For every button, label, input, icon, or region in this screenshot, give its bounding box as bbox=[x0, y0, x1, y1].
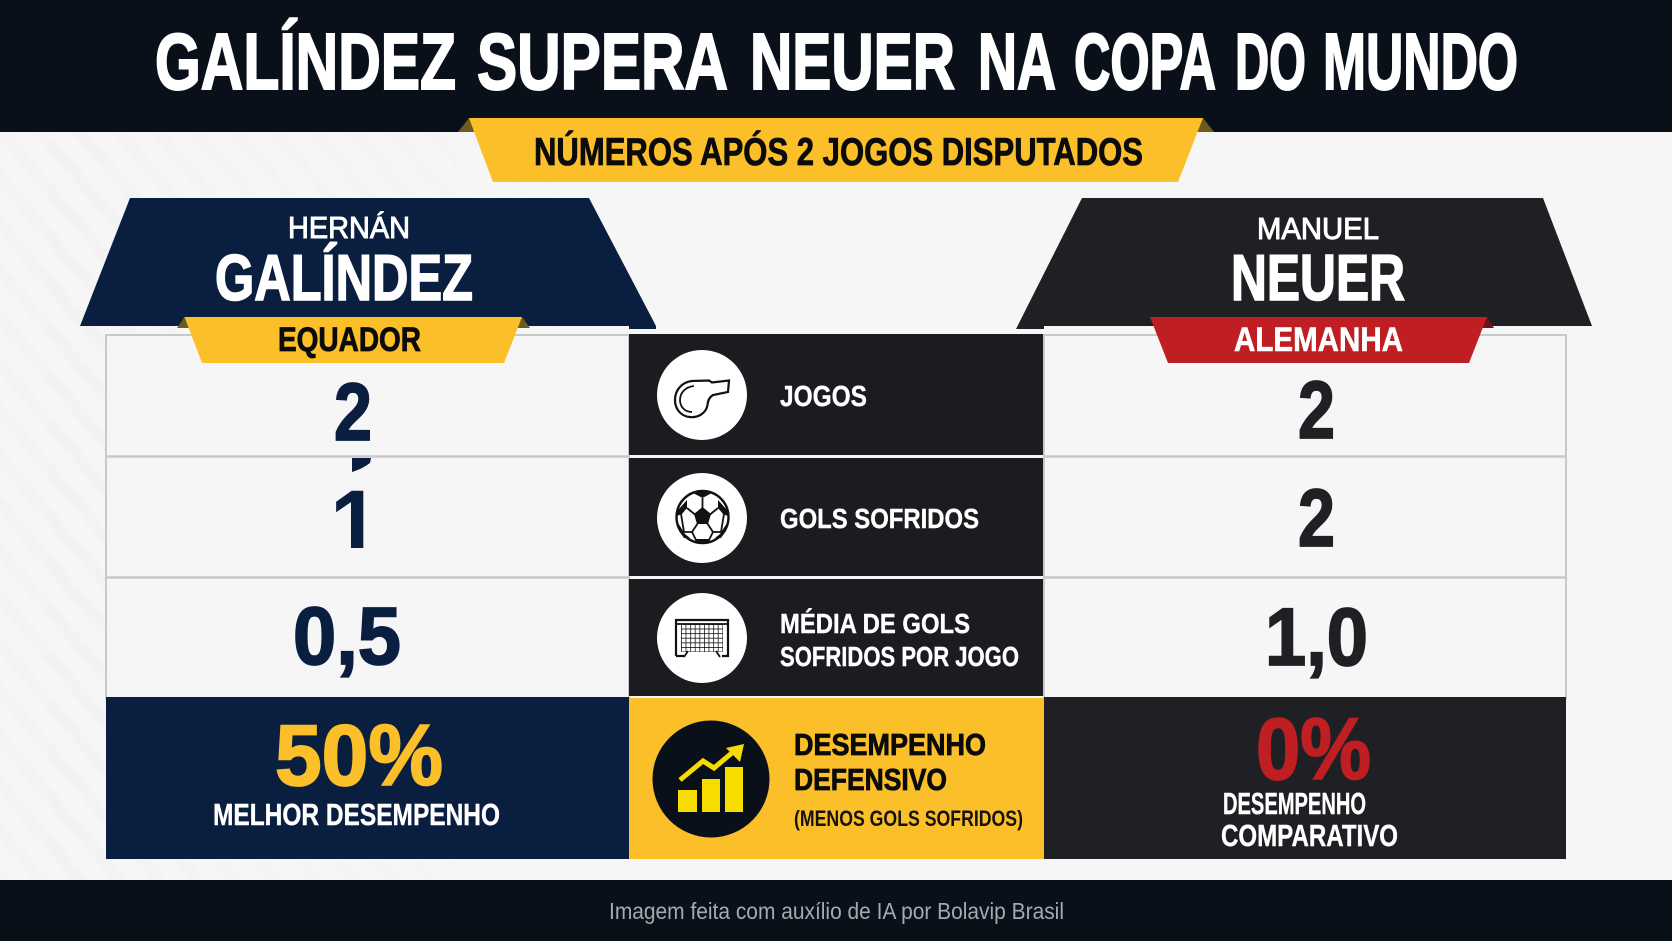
title: GALÍNDEZ bbox=[155, 17, 456, 106]
country banner: Alemanha: ALEMANHA bbox=[1234, 321, 1403, 359]
label: GOLS SOFRIDOS bbox=[780, 503, 979, 534]
label: MÉDIA DE GOLS bbox=[780, 608, 970, 639]
row: gols sofridos bbox=[629, 458, 1043, 576]
panel: Galíndez resultado bbox=[106, 697, 629, 859]
row: jogos bbox=[629, 334, 1043, 455]
first name: MANUEL bbox=[1257, 211, 1379, 246]
icon: soccer ball bbox=[657, 473, 747, 563]
country banner: Equador: EQUADOR bbox=[278, 321, 421, 359]
panel: Galíndez name plate bbox=[80, 198, 656, 363]
title: SUPERA bbox=[477, 17, 728, 106]
label: DEFENSIVO bbox=[794, 762, 947, 797]
header bar with title bbox=[0, 0, 1672, 132]
caption: DESEMPENHO bbox=[1223, 786, 1366, 821]
label bbox=[780, 608, 1019, 672]
surname: GALÍNDEZ bbox=[215, 241, 473, 314]
subtitle banner: NÚMEROS APÓS 2 JOGOS DISPUTADOS bbox=[534, 130, 1143, 174]
title: NEUER bbox=[750, 17, 955, 106]
value: Galíndez média: 0,5 bbox=[293, 591, 401, 682]
label: (MENOS GOLS SOFRIDOS) bbox=[794, 806, 1023, 831]
percentage: 0% bbox=[1256, 701, 1371, 798]
icon: goal bbox=[657, 593, 747, 683]
value: Galíndez jogos: 2 bbox=[334, 367, 372, 458]
subtitle banner bbox=[458, 118, 1214, 182]
panel: Neuer name plate bbox=[1016, 198, 1592, 363]
panel: Neuer resultado bbox=[1044, 697, 1566, 859]
caption: COMPARATIVO bbox=[1221, 818, 1398, 853]
percentage: 50% bbox=[275, 708, 443, 804]
first name: HERNÁN bbox=[288, 210, 410, 245]
surname: NEUER bbox=[1231, 241, 1405, 314]
title: MUNDO bbox=[1323, 17, 1518, 106]
value: Galíndez gols sofridos bbox=[336, 458, 371, 548]
row: média de gols bbox=[629, 579, 1043, 696]
title bbox=[155, 17, 1518, 106]
icon: rising bar chart bbox=[652, 720, 770, 838]
label: SOFRIDOS POR JOGO bbox=[780, 641, 1019, 672]
country banner: Alemanha bbox=[1150, 317, 1494, 363]
title: DO bbox=[1235, 17, 1306, 106]
comparison table grid bbox=[106, 335, 1566, 698]
title: COPA bbox=[1074, 17, 1216, 106]
label: JOGOS bbox=[780, 381, 867, 413]
caption bbox=[1221, 786, 1398, 853]
value: Neuer gols sofridos: 2 bbox=[1298, 473, 1335, 564]
icon: whistle bbox=[657, 350, 747, 440]
title: NA bbox=[978, 17, 1056, 106]
footer bar with credit: Imagem feita com auxílio de IA por Bolavip Brasil bbox=[609, 898, 1064, 924]
value: Neuer jogos: 2 bbox=[1298, 365, 1335, 456]
label: DESEMPENHO bbox=[794, 727, 986, 762]
country banner: Equador bbox=[177, 317, 530, 363]
caption: MELHOR DESEMPENHO bbox=[213, 797, 500, 832]
value: Neuer média: 1,0 bbox=[1265, 592, 1368, 683]
label bbox=[794, 727, 1023, 831]
value: Galíndez gols sofridos: 1 bbox=[330, 470, 380, 579]
row: desempenho defensivo bbox=[629, 698, 1044, 859]
footer bar with credit bbox=[0, 880, 1672, 941]
